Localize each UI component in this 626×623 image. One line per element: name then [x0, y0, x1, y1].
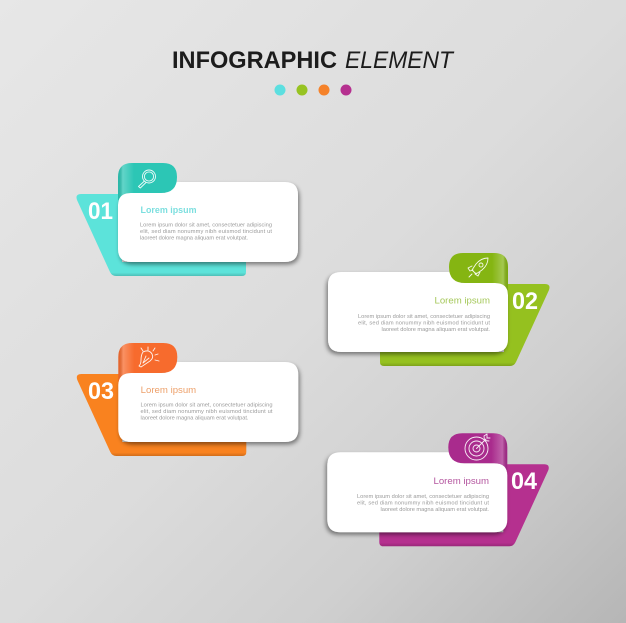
- text block 03: [140, 402, 273, 422]
- heading 01: Lorem ipsum: [140, 205, 196, 216]
- colour dots: [274, 84, 352, 96]
- text block 02: Lorem ipsum dolor sit amet, consectetuer adipiscing: [358, 314, 490, 320]
- text block 01: laoreet dolore magna aliquam erat volutpat.: [140, 236, 248, 242]
- heading 02: Lorem ipsum: [434, 296, 490, 306]
- number 03: 03: [88, 378, 114, 405]
- text block 04: laoreet dolore magna aliquam erat volutpat.: [380, 507, 489, 513]
- text block 01: elit, sed diam nonummy nibh euismod tincidunt ut: [140, 229, 272, 235]
- panel: step 03: [77, 343, 298, 456]
- text block 02: elit, sed diam nonummy nibh euismod tincidunt ut: [358, 320, 490, 326]
- panel: step 02: [328, 253, 550, 366]
- text block 02: [358, 314, 490, 333]
- title: [172, 47, 455, 74]
- title: ELEMENT: [345, 47, 455, 74]
- panel: step 01: [76, 163, 298, 276]
- icon: target: [465, 434, 490, 460]
- panel: step 04: [327, 433, 549, 546]
- text block 01: Lorem ipsum dolor sit amet, consectetuer adipiscing: [140, 222, 272, 228]
- text block 03: laoreet dolore magna aliquam erat volutpat.: [140, 416, 249, 422]
- icon: light bulb: [139, 347, 159, 367]
- text block 02: laoreet dolore magna aliquam erat volutpat.: [382, 327, 490, 333]
- text block 04: elit, sed diam nonummy nibh euismod tincidunt ut: [357, 500, 489, 506]
- icon: magnifier: [138, 170, 156, 188]
- heading 03: Lorem ipsum: [141, 385, 196, 396]
- text block 03: elit, sed diam nonummy nibh euismod tincidunt ut: [140, 409, 273, 415]
- number 04: 04: [511, 468, 538, 495]
- text block 03: Lorem ipsum dolor sit amet, consectetuer adipiscing: [140, 402, 272, 408]
- text block 01: [140, 222, 272, 242]
- text block 04: Lorem ipsum dolor sit amet, consectetuer adipiscing: [357, 494, 489, 500]
- number 02: 02: [512, 288, 538, 315]
- number 01: 01: [88, 198, 113, 225]
- icon: rocket: [468, 258, 488, 277]
- title: INFOGRAPHIC: [172, 47, 337, 74]
- text block 04: [357, 494, 489, 513]
- heading 04: Lorem ipsum: [434, 476, 489, 487]
